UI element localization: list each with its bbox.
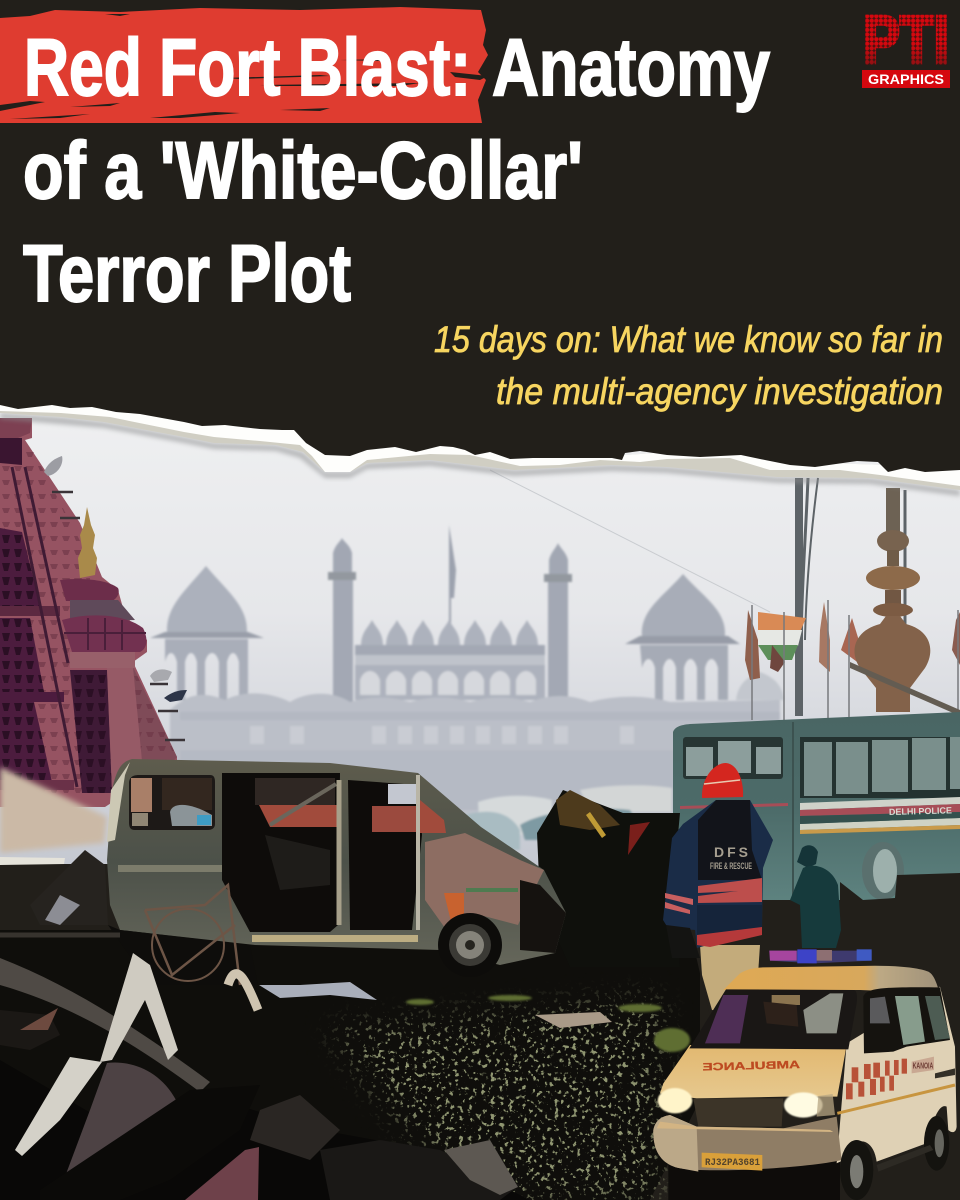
side panel (837, 987, 957, 1163)
bus stripes (800, 797, 960, 810)
torn dark header edge (0, 0, 960, 472)
bus wheel (862, 842, 904, 900)
ground speckle texture (320, 982, 680, 1200)
temple cap (0, 418, 32, 438)
torn paper shadow (0, 413, 960, 496)
van front fender and bonnet (425, 833, 566, 953)
right minaret (544, 543, 572, 702)
temple silhouette (0, 418, 177, 807)
side windows (863, 987, 950, 1053)
logo: PTI Graphics: GRAPHICS (868, 72, 944, 87)
dark lattice panels (0, 528, 74, 790)
illustration: right poles and flags (745, 478, 960, 720)
illustration: parked white cars (465, 785, 672, 850)
white shard (100, 953, 178, 1062)
jacket (663, 800, 773, 948)
debris behind van (30, 790, 680, 967)
scalloped drums (60, 579, 119, 601)
left dome pavilion (150, 566, 264, 700)
jacket lettering (710, 844, 752, 872)
door lettering: KANOIA (913, 1062, 933, 1071)
long white panel (15, 1057, 102, 1156)
red brush highlight (0, 7, 488, 123)
reflective bands (665, 878, 762, 947)
shadow and front tyres (668, 1160, 840, 1200)
illustration: foreground wreckage (0, 953, 530, 1200)
bright wreckage on ground (259, 982, 377, 1000)
ornate bronze pole (850, 488, 960, 716)
central pavilion with small domes (355, 620, 545, 700)
illustration: Red Fort silhouette in haze (150, 525, 784, 820)
checker pattern (846, 1059, 907, 1099)
rocker (877, 1145, 933, 1172)
logo: PTI Graphics (862, 14, 950, 88)
brush streaks (0, 14, 488, 119)
hood (660, 1045, 847, 1098)
torn paper strip (0, 405, 960, 490)
side stripe (837, 1085, 955, 1113)
van sill (252, 935, 418, 942)
number plate: RJ32PA3681 (705, 1157, 760, 1168)
van front door opening (348, 775, 446, 930)
temple diagonal ribs (12, 467, 77, 787)
illustration: firefighter (663, 763, 773, 1012)
van shell (107, 759, 566, 965)
golden finial (78, 507, 97, 578)
helmet (702, 763, 743, 798)
bumper (653, 1115, 842, 1170)
van main door opening (222, 773, 340, 932)
AMBULANCE mirrored text: AMBULANCE (702, 1059, 800, 1074)
fort wall (170, 693, 780, 810)
illustration: Delhi Police bus (673, 712, 960, 903)
title: of a 'White-Collar' (23, 126, 583, 216)
illustration: second officer (790, 845, 841, 948)
jacket lettering: DFS (714, 844, 751, 860)
title: Anatomy (492, 23, 770, 113)
light smudge and torn strip, left (0, 767, 107, 869)
headlights (658, 1088, 823, 1118)
grille (693, 1098, 783, 1127)
tall poles (799, 478, 905, 716)
number plate (702, 1153, 762, 1171)
dark lower scene (0, 864, 960, 1200)
photo: hazy sky (0, 400, 960, 870)
birds and spikes on temple (44, 456, 187, 740)
flags (745, 600, 960, 720)
power line (490, 470, 770, 612)
gloved hand (666, 925, 700, 958)
burnt bicycle (0, 885, 258, 1010)
lower tower (70, 670, 112, 793)
left minaret (328, 538, 356, 702)
front wheel (438, 913, 502, 977)
trousers (700, 945, 760, 1012)
bus lettering: DELHI POLICE (889, 805, 952, 817)
roof (723, 966, 940, 993)
windshield (689, 989, 857, 1049)
illustration: wet ground (259, 982, 692, 1200)
flag pole and flag (449, 525, 456, 628)
bus windows (683, 722, 960, 900)
illustration: ambulance (653, 949, 957, 1200)
door lettering (912, 1057, 934, 1073)
siren light bar (769, 949, 872, 963)
visible tyres (840, 1116, 949, 1200)
jacket lettering: FIRE & RESCUE (710, 861, 752, 872)
illustration: burnt van (0, 759, 566, 1010)
rear window (129, 775, 215, 830)
right dome pavilion (625, 574, 740, 700)
illustration: maroon temple on left (0, 418, 187, 807)
title: Terror Plot (23, 229, 351, 319)
dusky fragment (60, 1062, 178, 1190)
subtitle (434, 319, 943, 412)
curved dark panel (0, 958, 210, 1092)
title (23, 23, 770, 319)
title: Red Fort Blast: (24, 23, 471, 113)
